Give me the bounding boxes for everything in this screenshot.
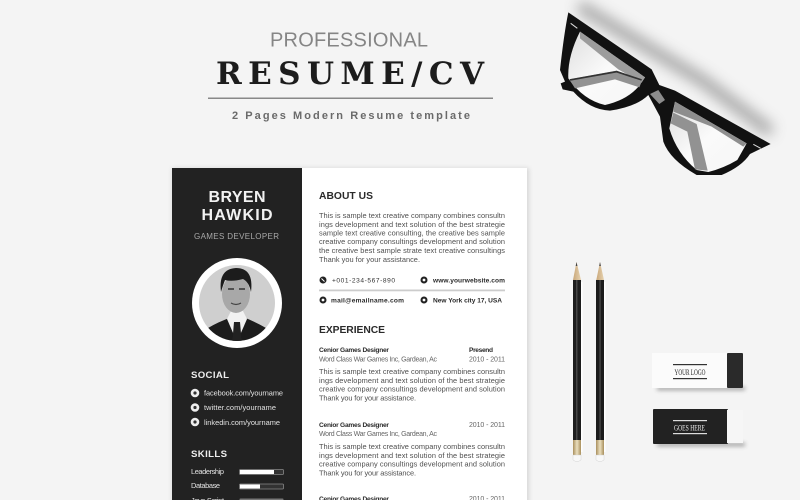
job title: GAMES DEVELOPER <box>194 232 279 241</box>
experience entry 1: This is sample text creative company combines consultn <box>319 367 505 376</box>
social list: facebook.com/yourname <box>204 388 283 398</box>
experience entry 3 <box>319 496 505 500</box>
about paragraph: This is sample text creative company combines consultn <box>319 211 505 220</box>
social list: linkedin.com/yourname <box>204 418 280 427</box>
subtitle: 2 Pages Modern Resume template <box>232 110 470 122</box>
social list <box>191 388 283 427</box>
panel: about us <box>319 191 505 304</box>
about paragraph: ings development and text solution of the best strategie <box>319 220 505 229</box>
experience entry 1: Presend <box>469 347 493 354</box>
contact details: mail@emailname.com <box>331 298 404 304</box>
paper <box>172 168 527 500</box>
experience entry 1: ings development and text solution of the best strategie <box>319 376 505 385</box>
panel: resume page <box>172 168 527 500</box>
about paragraph: the creative best sample strate text creative consultings <box>319 246 505 255</box>
social list: twitter.com/yourname <box>204 403 276 412</box>
experience entry 2: This is sample text creative company combines consultn <box>319 442 505 451</box>
icon: eraser goes here: GOES HERE <box>674 424 705 432</box>
icon: eraser your logo: YOUR LOGO <box>674 368 706 377</box>
about paragraph: sample text creative consulting, the creative bes sample <box>319 228 505 238</box>
experience entry 2: ings development and text solution of the best strategie <box>319 451 505 460</box>
contact details: +001-234-567-890 <box>332 278 395 284</box>
contact details: New York city 17, USA <box>433 298 502 304</box>
eraser shadows <box>657 387 745 446</box>
experience entry 2: creative company consultings development and solution <box>319 460 505 468</box>
experience entry 2: Word Class War Games Inc, Gardean, Ac <box>319 431 438 438</box>
experience entry 2 <box>319 422 505 478</box>
portrait photo <box>192 258 282 348</box>
social heading: SOCIAL <box>191 370 229 381</box>
about paragraph: Thank you for your assistance. <box>319 255 420 264</box>
about paragraph <box>319 211 505 264</box>
contact details <box>319 276 505 304</box>
experience entry 2: Cenior Games Designer <box>319 422 389 429</box>
name: BRYEN <box>208 189 266 206</box>
heading: resume cv: RESUME/CV <box>216 56 485 92</box>
icon: glasses <box>560 12 771 175</box>
header title block <box>208 30 493 122</box>
skills heading: SKILLS <box>191 449 228 460</box>
heading: professional: PROFESSIONAL <box>270 30 428 52</box>
panel: sidebar <box>172 168 302 500</box>
header rule <box>208 98 493 99</box>
glasses shadow <box>579 6 771 132</box>
experience entry 2: Thank you for your assistance. <box>319 468 416 478</box>
experience entry 1: Cenior Games Designer <box>319 347 389 354</box>
experience entry 1: 2010 - 2011 <box>469 356 505 364</box>
name <box>202 189 272 224</box>
experience entry 2: 2010 - 2011 <box>469 422 505 429</box>
name: HAWKID <box>202 207 272 224</box>
heading: experience: EXPERIENCE <box>319 325 385 336</box>
skill bars: Database <box>191 481 220 490</box>
icon: eraser goes here <box>653 409 743 444</box>
about paragraph: creative company consultings development and solution <box>319 237 505 246</box>
resume paper shadow <box>172 168 529 500</box>
pencil highlights <box>581 282 606 452</box>
experience entry 1: Thank you for your assistance. <box>319 394 416 402</box>
sidebar background <box>172 168 302 500</box>
skill bars: Leadership <box>191 467 224 476</box>
icon: pencil left <box>573 262 581 462</box>
experience entry 1: Word Class War Games Inc, Gardean, Ac <box>319 356 438 364</box>
skill bars <box>191 467 284 500</box>
contact details: www.yourwebsite.com <box>432 278 505 284</box>
heading: about us: ABOUT US <box>319 191 373 202</box>
panel: experience <box>319 325 505 500</box>
icon: eraser your logo <box>652 353 743 388</box>
icon: pencil right <box>596 262 604 462</box>
experience entry 1: creative company consultings development and solution <box>319 384 505 394</box>
experience entry 1 <box>319 347 505 402</box>
